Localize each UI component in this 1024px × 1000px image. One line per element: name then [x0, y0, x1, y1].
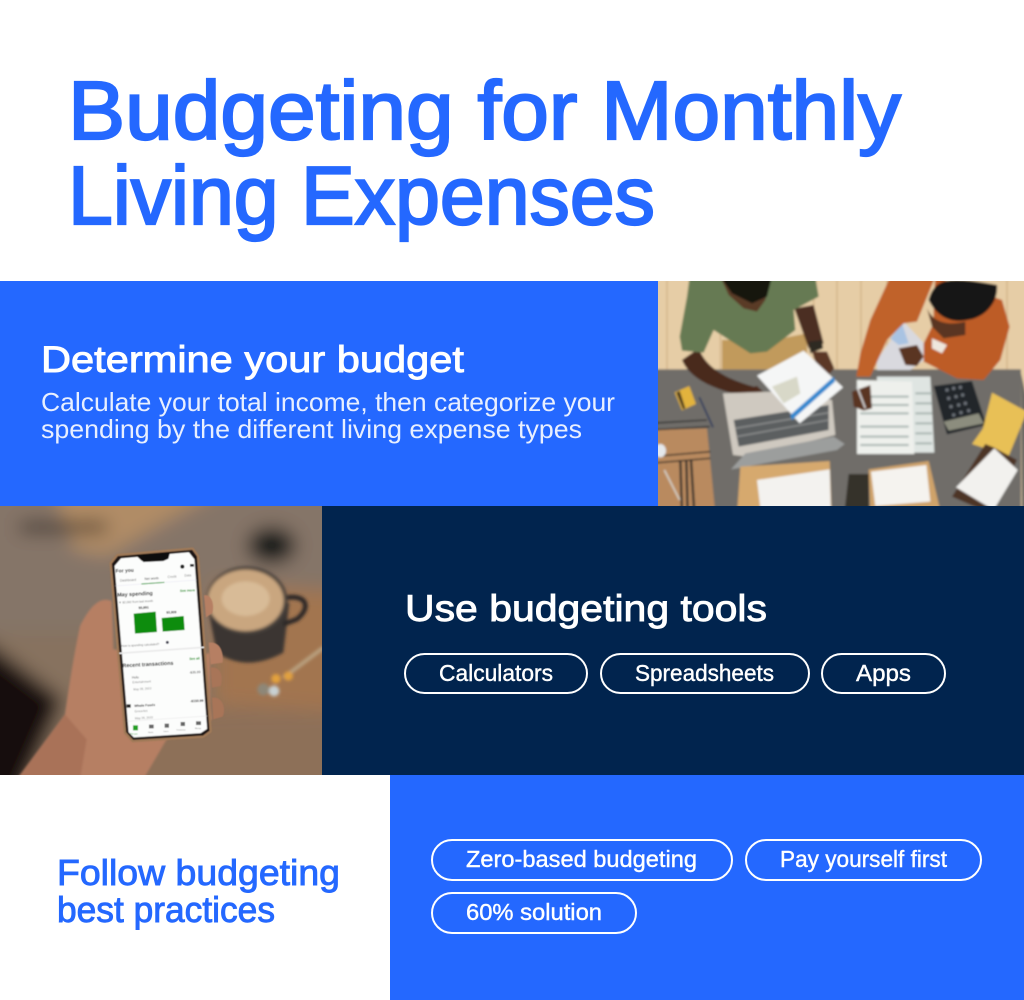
- pill: zero-based budgeting: Zero-based budgeting: [466, 846, 697, 872]
- notebook tray: [650, 428, 715, 513]
- pill: pay yourself first: [746, 840, 981, 880]
- pill: apps: [822, 654, 945, 693]
- pill: zero-based budgeting: [432, 840, 732, 880]
- pill: calculators: [405, 654, 587, 693]
- phone: May spending: [117, 591, 153, 599]
- heading: follow budgeting best practices: best practices: [57, 889, 275, 930]
- phone: [111, 549, 211, 741]
- phone: Entertainment: [132, 679, 151, 684]
- text block: budget description: Calculate your total income, then categorize your: [41, 387, 615, 417]
- phone: Data: [184, 573, 192, 578]
- phone: Money: [195, 728, 201, 730]
- man: [722, 333, 807, 369]
- title: [68, 64, 902, 242]
- coffee mug: [206, 566, 323, 696]
- pill: spreadsheets: [601, 654, 809, 693]
- pill: apps: Apps: [856, 660, 911, 686]
- pill: 60% solution: [432, 893, 636, 933]
- title: Living Expenses: [68, 149, 655, 242]
- phone: Insurance: [177, 729, 186, 731]
- text block: budget description: spending by the different living expense types: [41, 414, 582, 444]
- laptop: [723, 392, 835, 457]
- heading: follow budgeting best practices: [57, 852, 340, 930]
- photo: couple budgeting at table: [658, 281, 1024, 506]
- phone: Dashboard: [120, 578, 136, 583]
- phone: $5,891: [139, 605, 149, 610]
- heading: follow budgeting best practices: Follow budgeting: [57, 852, 340, 893]
- phone: For you: [131, 733, 137, 735]
- phone: Groceries: [135, 709, 148, 713]
- paper in hand: [757, 351, 843, 423]
- calculator: [934, 381, 986, 434]
- phone: How is spending calculated?: [121, 642, 160, 648]
- phone: $3,809: [166, 610, 177, 615]
- phone: See more: [180, 588, 195, 593]
- phone: May 28, 2022: [133, 686, 152, 691]
- phone: See all: [189, 656, 200, 661]
- woman: [877, 322, 934, 370]
- yellow envelope: [972, 393, 1024, 456]
- hand: [17, 600, 212, 779]
- phone UI: For you: [115, 568, 134, 575]
- photo: hand holding phone by coffee: [0, 506, 322, 775]
- phone: Credit: [168, 575, 177, 579]
- phone: ▼ $2,092 from last month: [119, 599, 153, 605]
- card and pen: [675, 386, 696, 410]
- pill: calculators: Calculators: [439, 660, 553, 686]
- tax form: [877, 377, 934, 453]
- pill: 60% solution: 60% solution: [466, 899, 602, 925]
- title: Budgeting for Monthly: [68, 64, 902, 157]
- phone: Recent transactions: [122, 661, 174, 669]
- panel: determine your budget: [0, 281, 658, 506]
- panel: use budgeting tools: [322, 506, 1024, 775]
- spoon: [283, 648, 323, 678]
- panel: best practices pills: [390, 775, 1024, 1000]
- folders: [737, 461, 832, 513]
- phone: Learn: [163, 731, 168, 733]
- phone: Whole Foods: [134, 703, 155, 708]
- phone: Net worth: [145, 576, 159, 581]
- heading: determine your budget: Determine your budget: [41, 339, 465, 380]
- notebook: [952, 444, 1017, 513]
- pill: pay yourself first: Pay yourself first: [780, 846, 948, 872]
- heading: use budgeting tools: Use budgeting tools: [405, 588, 767, 629]
- phone: -$35.99: [189, 670, 201, 675]
- phone: May 26, 2022: [135, 715, 154, 720]
- phone: Goals: [148, 732, 153, 734]
- phone: Hulu: [132, 675, 139, 680]
- fingers wrapping phone edge: [204, 595, 224, 719]
- pill: spreadsheets: Spreadsheets: [635, 660, 774, 686]
- text block: budget description: [41, 387, 615, 444]
- phone: -$150.99: [190, 699, 204, 703]
